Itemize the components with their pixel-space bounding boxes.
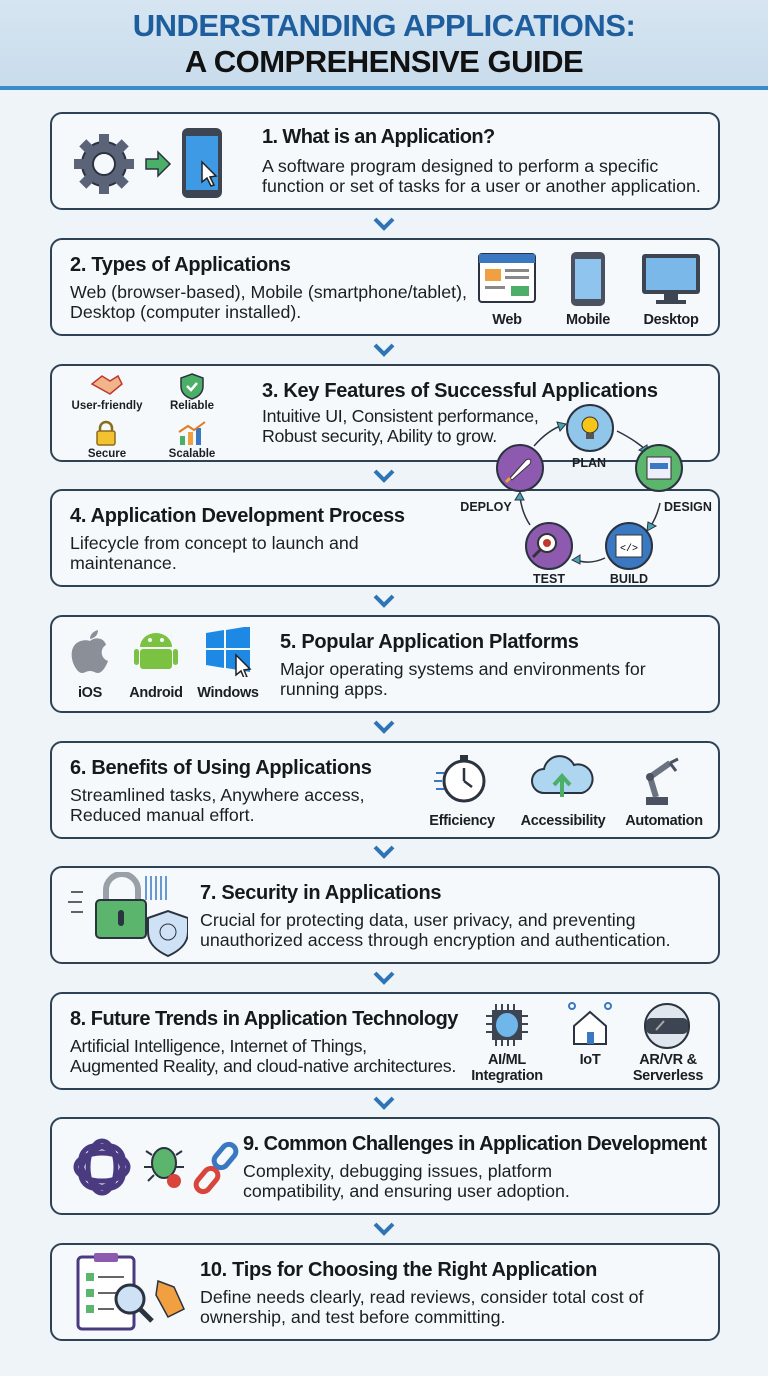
panel 3 bbox=[50, 364, 720, 462]
label accessibility: Accessibility bbox=[521, 813, 605, 829]
text 4: maintenance. bbox=[70, 553, 177, 573]
label mobile: Mobile bbox=[566, 312, 610, 328]
label ar/vr bbox=[633, 1052, 703, 1084]
icon: gear to phone bbox=[74, 128, 222, 198]
text 2 bbox=[70, 282, 467, 322]
heading 6: 6. Benefits of Using Applications bbox=[70, 757, 372, 779]
heading 4: 4. Application Development Process bbox=[70, 505, 405, 527]
label iot: IoT bbox=[580, 1052, 600, 1068]
label windows: Windows bbox=[197, 685, 259, 701]
feature icons: Scalable bbox=[169, 448, 215, 460]
heading 2: 2. Types of Applications bbox=[70, 254, 291, 276]
feature icons: Reliable bbox=[170, 400, 214, 412]
icons: web mobile desktop bbox=[478, 252, 700, 328]
text 7 bbox=[200, 910, 671, 950]
title bbox=[133, 8, 635, 79]
panel 4 bbox=[50, 489, 720, 587]
arrow bbox=[374, 218, 394, 231]
text 10: ownership, and test before committing. bbox=[200, 1307, 505, 1327]
title: A COMPREHENSIVE GUIDE bbox=[185, 44, 583, 79]
icon: clipboard magnifier tag bbox=[76, 1253, 185, 1330]
header band bbox=[0, 0, 768, 90]
panel 2 bbox=[50, 238, 720, 336]
text 6 bbox=[70, 785, 365, 825]
text 9 bbox=[243, 1161, 570, 1201]
cycle diagram: DESIGN bbox=[664, 500, 712, 514]
heading 9: 9. Common Challenges in Application Development bbox=[243, 1133, 706, 1155]
text 3: Robust security, Ability to grow. bbox=[262, 426, 497, 446]
text 8 bbox=[70, 1036, 456, 1076]
heading 7: 7. Security in Applications bbox=[200, 882, 441, 904]
label ai/ml bbox=[471, 1052, 543, 1084]
label efficiency: Efficiency bbox=[429, 813, 495, 829]
panel 6 bbox=[50, 741, 720, 839]
text 5: running apps. bbox=[280, 679, 388, 699]
text 8: Artificial Intelligence, Internet of Things, bbox=[70, 1036, 367, 1056]
text 9: Complexity, debugging issues, platform bbox=[243, 1161, 552, 1181]
panel 7 bbox=[50, 866, 720, 964]
label ar/vr: Serverless bbox=[633, 1068, 703, 1084]
text 10: Define needs clearly, read reviews, consider total cost of bbox=[200, 1287, 643, 1307]
text 8: Augmented Reality, and cloud-native architectures. bbox=[70, 1056, 456, 1076]
text 4: Lifecycle from concept to launch and bbox=[70, 533, 359, 553]
text 6: Reduced manual effort. bbox=[70, 805, 255, 825]
text 5 bbox=[280, 659, 646, 699]
text 7: Crucial for protecting data, user privacy, and preventing bbox=[200, 910, 636, 930]
heading 8: 8. Future Trends in Application Technology bbox=[70, 1008, 458, 1030]
panel 10 bbox=[50, 1243, 720, 1341]
platform icons bbox=[72, 627, 259, 701]
cycle diagram: DEPLOY bbox=[460, 500, 512, 514]
text 2: Web (browser-based), Mobile (smartphone/tablet), bbox=[70, 282, 467, 302]
cycle diagram: PLAN bbox=[572, 456, 606, 470]
feature icons: Secure bbox=[88, 448, 126, 460]
feature icons: User-friendly bbox=[72, 400, 142, 412]
challenge icons bbox=[74, 1138, 238, 1196]
trend icons bbox=[471, 1002, 703, 1084]
panel 8 bbox=[50, 992, 720, 1090]
heading 5: 5. Popular Application Platforms bbox=[280, 631, 579, 653]
label android: Android bbox=[129, 685, 183, 701]
text 1: function or set of tasks for a user or another application. bbox=[262, 176, 701, 196]
benefit icons bbox=[429, 755, 703, 829]
label ai/ml: Integration bbox=[471, 1068, 543, 1084]
label automation: Automation bbox=[625, 813, 703, 829]
text 10 bbox=[200, 1287, 644, 1327]
text 9: compatibility, and ensuring user adoption. bbox=[243, 1181, 570, 1201]
text 1: A software program designed to perform a specific bbox=[262, 156, 658, 176]
label ar/vr: AR/VR & bbox=[639, 1052, 697, 1068]
cycle diagram: TEST bbox=[533, 572, 565, 586]
panel 1 bbox=[50, 112, 720, 210]
panel 5 bbox=[50, 615, 720, 713]
cycle diagram bbox=[460, 404, 712, 586]
cycle diagram: </> bbox=[620, 543, 638, 555]
label web: Web bbox=[492, 312, 522, 328]
text 3 bbox=[262, 406, 538, 446]
heading 3: 3. Key Features of Successful Applications bbox=[262, 380, 658, 402]
label ios: iOS bbox=[78, 685, 102, 701]
label desktop: Desktop bbox=[643, 312, 699, 328]
text 6: Streamlined tasks, Anywhere access, bbox=[70, 785, 365, 805]
text 1 bbox=[262, 156, 701, 196]
label ai/ml: AI/ML bbox=[488, 1052, 526, 1068]
cycle diagram: BUILD bbox=[610, 572, 648, 586]
title: UNDERSTANDING APPLICATIONS: bbox=[133, 8, 635, 43]
heading 1: 1. What is an Application? bbox=[262, 126, 495, 148]
feature icons bbox=[72, 373, 215, 460]
text 5: Major operating systems and environments for bbox=[280, 659, 646, 679]
icon: lock and shield bbox=[68, 872, 188, 958]
heading 10: 10. Tips for Choosing the Right Application bbox=[200, 1259, 597, 1281]
panel 9 bbox=[50, 1117, 720, 1215]
text 4 bbox=[70, 533, 359, 573]
text 3: Intuitive UI, Consistent performance, bbox=[262, 406, 538, 426]
text 2: Desktop (computer installed). bbox=[70, 302, 301, 322]
text 7: unauthorized access through encryption and authentication. bbox=[200, 930, 671, 950]
